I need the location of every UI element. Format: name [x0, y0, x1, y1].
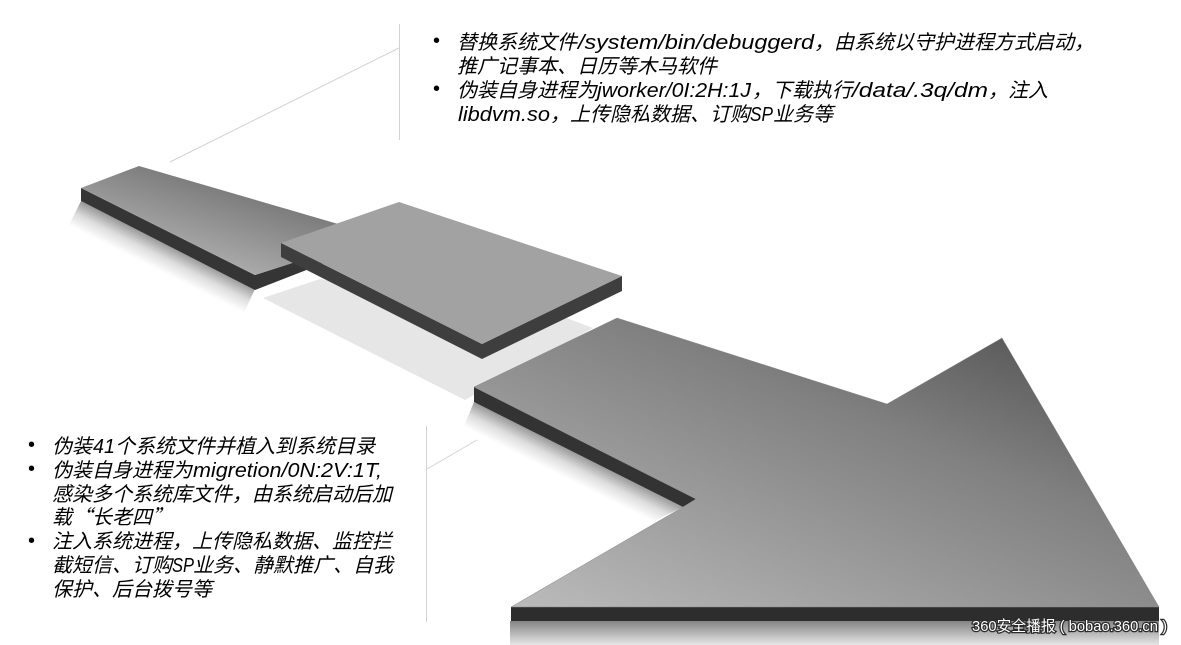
lower callout leader lines: [426, 426, 477, 622]
text block: upper callout: /system/bin/debuggerd: [576, 32, 815, 54]
text block: upper callout: /data/.3q/dm: [850, 80, 988, 102]
text block: lower callout: 伪装自身进程为: [52, 454, 192, 483]
floor shadow under middle plate: [263, 279, 593, 400]
arrow step 3: arrow head plate: [464, 318, 1159, 645]
text block: upper callout: ，下载执行: [752, 74, 855, 103]
text block: upper callout: 业务等: [773, 98, 836, 127]
text block: lower callout: 感染多个系统库文件，由系统启动后加: [52, 478, 394, 507]
text block: lower callout: •: [28, 458, 35, 480]
text block: upper callout: 伪装自身进程为: [457, 74, 597, 103]
text block: lower callout: 截短信、订购: [52, 549, 172, 578]
arrow step 2: middle plate: [281, 202, 622, 359]
text block: lower callout: 41: [93, 436, 115, 458]
watermark: 360安全播报 ( bobao.360.cn ): [972, 617, 1167, 635]
text block: upper callout: SP: [750, 104, 774, 126]
text block: lower callout: SP: [172, 555, 195, 577]
text block: lower callout: [28, 430, 395, 602]
text block: upper callout: 推广记事本、日历等木马软件: [457, 50, 719, 79]
text block: upper callout: jworker/0I:2H:1J: [594, 80, 752, 102]
text block: lower callout: 业务、静默推广、自我: [193, 549, 395, 578]
text block: lower callout: •: [28, 530, 35, 552]
text block: lower callout: 保护、后台拨号等: [52, 573, 215, 602]
text block: lower callout: 注入系统进程，上传隐私数据、监控拦: [52, 525, 394, 554]
text block: lower callout: 个系统文件并植入到系统目录: [115, 430, 377, 459]
text block: lower callout: migretion/0N:2V:1T,: [193, 460, 382, 482]
text block: upper callout: [433, 26, 1094, 127]
text block: upper callout: 替换系统文件: [457, 26, 577, 55]
text block: upper callout: •: [433, 78, 440, 100]
text block: upper callout: libdvm.so: [458, 104, 550, 126]
text block: lower callout: •: [28, 434, 35, 456]
text block: lower callout: 伪装: [52, 430, 92, 459]
arrow step 1: rear plate: [69, 166, 345, 315]
text block: upper callout: •: [433, 30, 440, 52]
text block: upper callout: ，上传隐私数据、订购: [550, 98, 753, 127]
text block: upper callout: ，注入: [988, 74, 1048, 103]
upper callout leader lines: [170, 24, 400, 162]
text block: upper callout: ，由系统以守护进程方式启动，: [814, 26, 1094, 55]
text block: lower callout: 载“长老四”: [52, 501, 172, 530]
